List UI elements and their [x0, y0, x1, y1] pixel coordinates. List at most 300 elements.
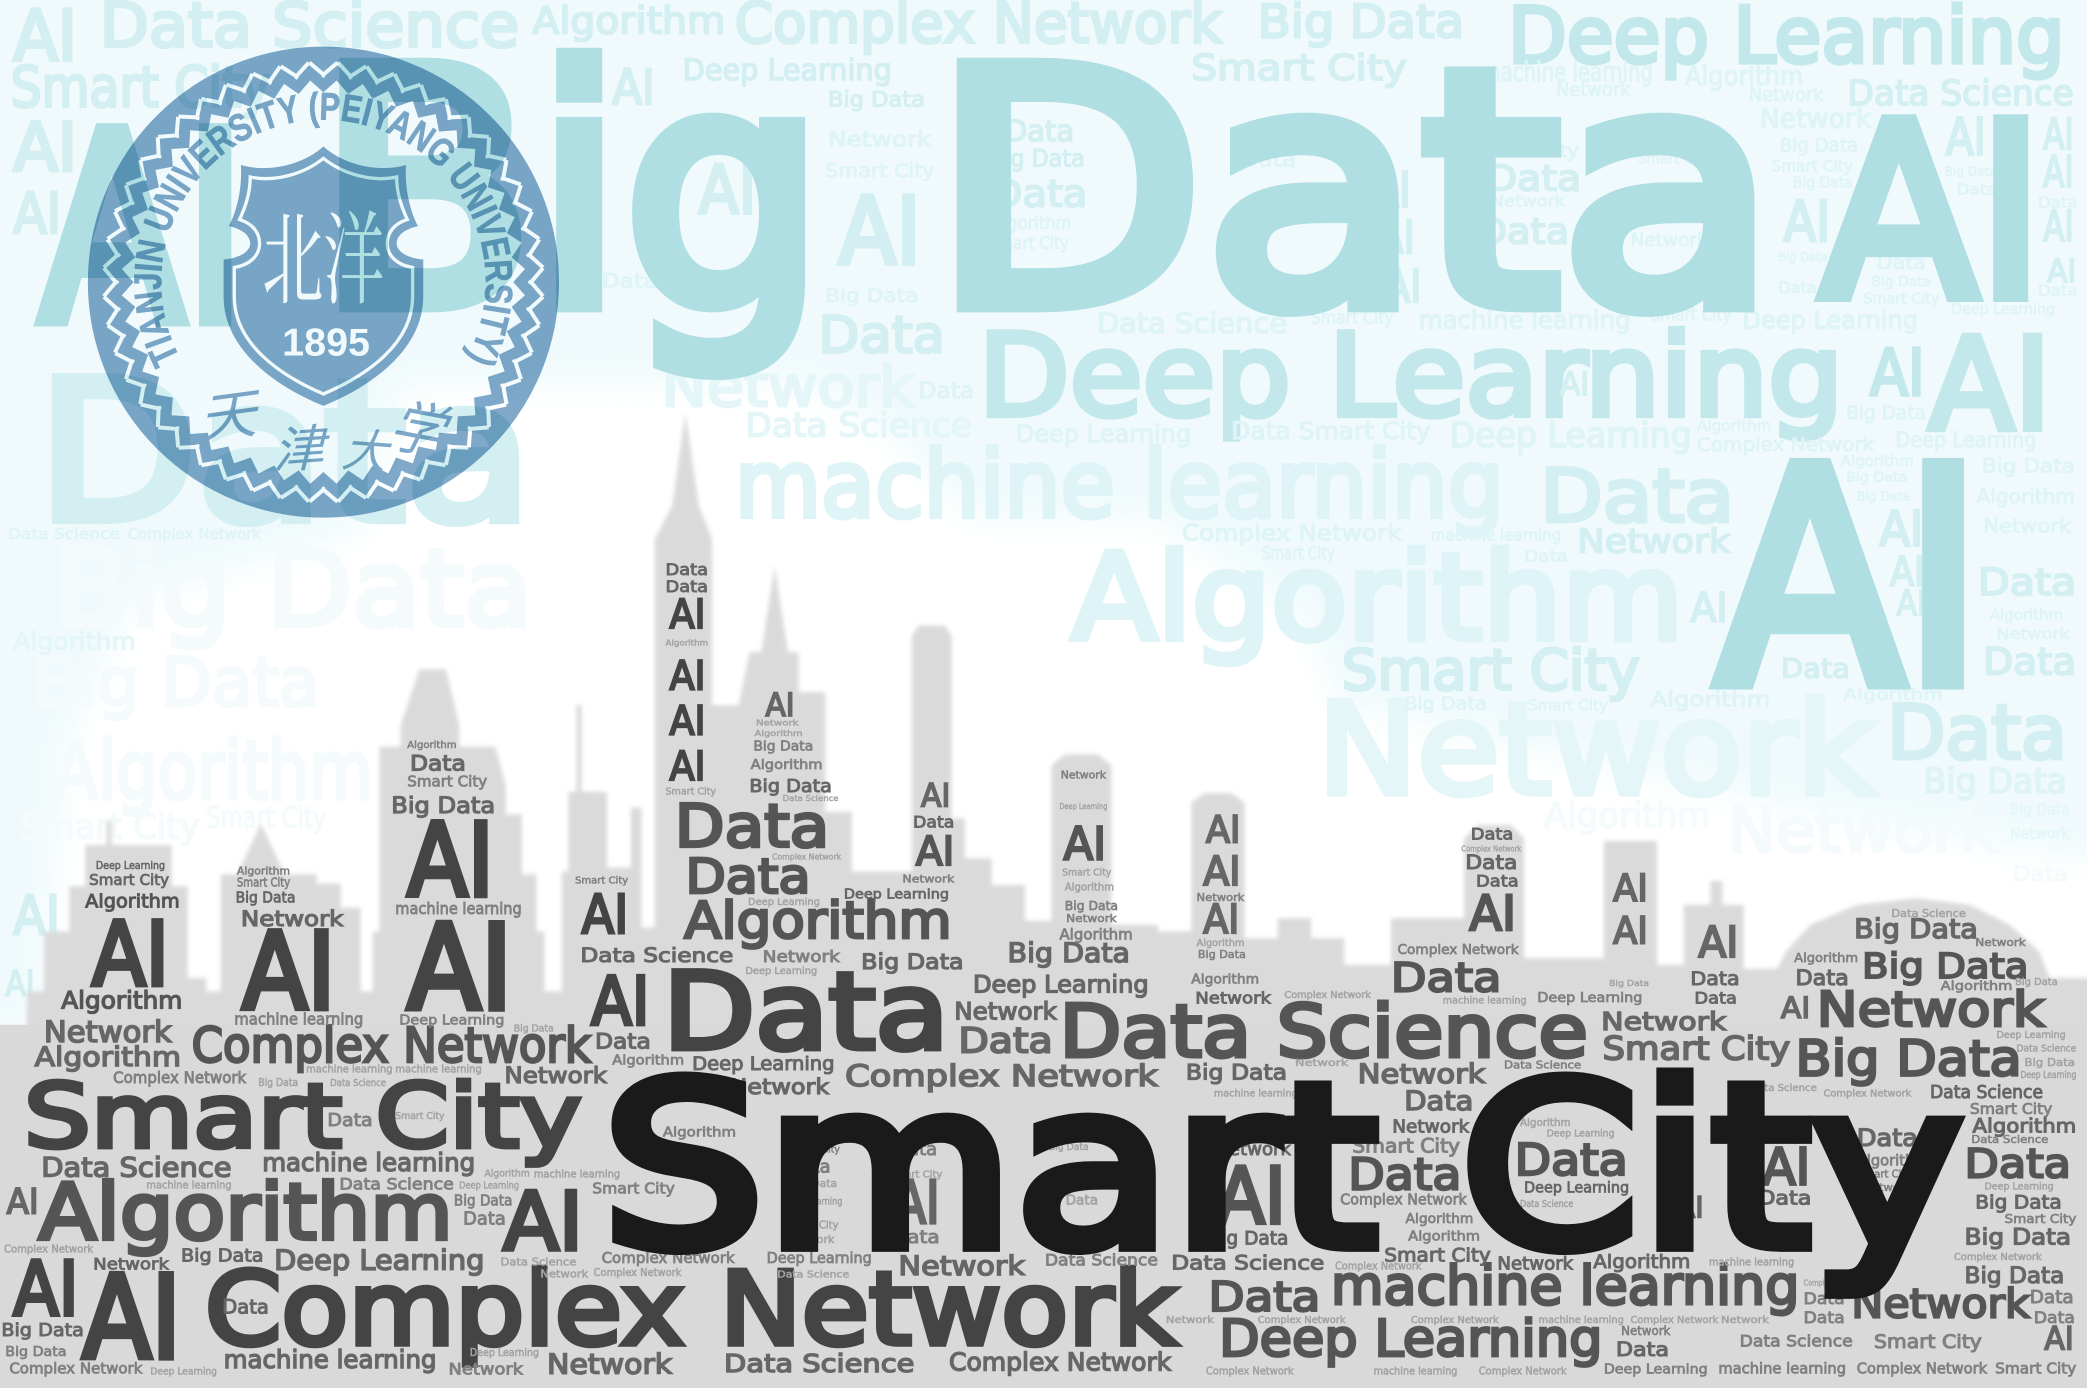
- lower word cloud in grey over the skyline: Data Science: [1171, 1251, 1324, 1275]
- upper word cloud in teal: Complex Network: [128, 526, 261, 543]
- lower word cloud in grey over the skyline: Algorithm: [1197, 938, 1244, 949]
- upper word cloud in teal: AI: [2043, 202, 2074, 252]
- lower word cloud in grey over the skyline: Data: [1965, 1142, 2071, 1188]
- lower word cloud in grey over the skyline: Network: [1601, 1007, 1727, 1036]
- word: AI left: AI: [40, 79, 246, 381]
- lower word cloud in grey over the skyline: Network: [729, 1075, 830, 1100]
- lower word cloud in grey over the skyline: Data: [1694, 988, 1737, 1007]
- lower word cloud in grey over the skyline: Complex Network: [1284, 990, 1372, 1001]
- word: Deep Learning: Deep Learning: [978, 310, 1843, 442]
- lower word cloud in grey over the skyline: AI: [7, 1183, 39, 1223]
- lower word cloud in grey over the skyline: Data Science: [1520, 1199, 1573, 1210]
- lower word cloud in grey over the skyline: Network: [1358, 1059, 1486, 1090]
- upper word cloud in teal: Data: [602, 268, 658, 292]
- upper word cloud in teal: Big Data: [1982, 453, 2075, 477]
- upper word cloud in teal: Data: [1978, 560, 2076, 604]
- lower word cloud in grey over the skyline: Smart City: [1874, 1332, 1982, 1353]
- lower word cloud in grey over the skyline: AI: [2044, 1319, 2074, 1357]
- upper word cloud in teal: Network: [1728, 796, 1997, 867]
- lower word cloud in grey over the skyline: Complex Network: [1857, 1360, 1988, 1377]
- upper word cloud in teal: Algorithm: [1841, 453, 1914, 470]
- upper word cloud in teal: Network: [1491, 191, 1566, 210]
- upper word cloud in teal: AI: [2047, 252, 2076, 290]
- upper word cloud in teal: Big Data: [1846, 471, 1907, 486]
- lower word cloud in grey over the skyline: Data Science: [2016, 1043, 2077, 1054]
- lower word cloud in grey over the skyline: Network: [241, 907, 344, 932]
- lower word cloud in grey over the skyline: Data Science: [500, 1256, 576, 1269]
- lower word cloud in grey over the skyline: Data Science: [783, 794, 839, 803]
- lower word cloud in grey over the skyline: Big Data: [791, 1177, 837, 1190]
- lower word cloud in grey over the skyline: Data: [1690, 969, 1740, 990]
- lower word cloud in grey over the skyline: AI: [921, 776, 950, 814]
- lower word cloud in grey over the skyline: Complex Network: [594, 1266, 682, 1279]
- upper word cloud in teal: Algorithm: [1544, 797, 1710, 837]
- lower word cloud in grey over the skyline: Complex Network: [1411, 1315, 1499, 1326]
- lower word cloud in grey over the skyline: Big Data: [1975, 1192, 2062, 1213]
- lower word cloud in grey over the skyline: Deep Learning: [748, 897, 820, 908]
- spire words: Smart City: [665, 786, 717, 797]
- lower word cloud in grey over the skyline: Data Science: [1750, 1083, 1817, 1094]
- lower word cloud in grey over the skyline: Deep Learning: [96, 859, 165, 872]
- lower word cloud in grey over the skyline: AI: [1613, 909, 1648, 953]
- spire words: AI: [669, 744, 705, 790]
- word: Network: Network: [1318, 676, 1874, 823]
- lower word cloud in grey over the skyline: Smart City: [1384, 1246, 1491, 1267]
- upper word cloud in teal: Smart City: [1772, 157, 1853, 176]
- upper word cloud in teal: Deep Learning: [1016, 420, 1191, 448]
- lower word cloud in grey over the skyline: Big Data: [2015, 977, 2058, 988]
- lower word cloud in grey over the skyline: Data Science: [1891, 907, 1966, 920]
- upper word cloud in teal: Big Data: [2010, 801, 2070, 818]
- lower word cloud in grey over the skyline: Big Data: [1198, 948, 1246, 961]
- lower word cloud in grey over the skyline: Data: [327, 1111, 373, 1131]
- lower word cloud in grey over the skyline: Complex Network: [113, 1068, 247, 1087]
- lower word cloud in grey over the skyline: Data: [410, 752, 466, 777]
- upper word cloud in teal: Data: [1877, 250, 1926, 274]
- lower word cloud in grey over the skyline: Smart City: [592, 1181, 675, 1198]
- upper word cloud in teal: AI: [1870, 337, 1925, 411]
- lower word cloud in grey over the skyline: Deep Learning: [150, 1367, 217, 1378]
- upper word cloud in teal: Network: [1650, 138, 1698, 152]
- lower word cloud in grey over the skyline: Big Data: [2024, 1056, 2075, 1069]
- upper word cloud in teal: Network: [662, 355, 915, 420]
- upper word cloud in teal: AI: [13, 108, 77, 186]
- lower word cloud in grey over the skyline: Algorithm: [663, 1125, 736, 1140]
- lower word cloud in grey over the skyline: Network: [898, 1251, 1026, 1282]
- lower word cloud in grey over the skyline: AI: [894, 1169, 940, 1237]
- lower word cloud in grey over the skyline: Deep Learning: [1059, 802, 1107, 811]
- lower word cloud in grey over the skyline: Smart City: [2004, 1212, 2076, 1226]
- seal shield: [224, 146, 423, 406]
- lower word cloud in grey over the skyline: Deep Learning: [745, 966, 817, 977]
- word: Smart City main: Smart City: [602, 1037, 1963, 1300]
- lower word cloud in grey over the skyline: Smart City: [785, 1218, 839, 1231]
- lower word cloud in grey over the skyline: Data: [1348, 1150, 1461, 1201]
- lower word cloud in grey over the skyline: Complex Network: [1398, 943, 1519, 958]
- upper word cloud in teal: Network: [1760, 104, 1872, 135]
- lower word cloud in grey over the skyline: AI: [1217, 1152, 1286, 1242]
- lower word cloud in grey over the skyline: Big Data: [861, 950, 964, 975]
- lower word cloud in grey over the skyline: Algorithm: [1065, 880, 1114, 893]
- lower word cloud in grey over the skyline: Network: [1066, 912, 1118, 925]
- lower word cloud in grey over the skyline: Data Science: [339, 1175, 454, 1194]
- upper word cloud in teal: Algorithm: [1843, 685, 1943, 704]
- upper word cloud in teal: Algorithm: [1977, 484, 2075, 508]
- word: Big: Big: [317, 2, 825, 380]
- lower word cloud in grey over the skyline: Data: [1476, 871, 1519, 890]
- upper word cloud in teal: Algorithm: [992, 214, 1071, 234]
- spire words: AI: [669, 592, 705, 638]
- spire words: Data: [665, 577, 708, 596]
- upper word cloud in teal: Deep Learning: [1895, 428, 2036, 453]
- lower word cloud in grey over the skyline: Complex Network: [192, 1019, 591, 1074]
- lower word cloud in grey over the skyline: Smart City: [1750, 1134, 1800, 1145]
- upper word cloud in teal: Complex Network: [1182, 520, 1403, 546]
- lower word cloud in grey over the skyline: AI: [916, 829, 954, 875]
- upper word cloud in teal: AI: [2043, 110, 2074, 160]
- upper word cloud in teal: Big Data: [1404, 694, 1487, 714]
- lower word cloud in grey over the skyline: Algorithm: [1593, 1252, 1690, 1273]
- word: Algorithm: Algorithm: [39, 1168, 453, 1258]
- lower word cloud in grey over the skyline: Network: [1166, 1315, 1215, 1326]
- lower word cloud in grey over the skyline: machine learning: [1718, 1360, 1846, 1377]
- lower word cloud in grey over the skyline: Big Data: [1862, 947, 2028, 987]
- lower word cloud in grey over the skyline: AI: [13, 1246, 79, 1333]
- upper word cloud in teal: Network: [1996, 626, 2070, 643]
- lower word cloud in grey over the skyline: Deep Learning: [1537, 991, 1642, 1006]
- upper word cloud in teal: Smart City: [1476, 141, 1579, 162]
- upper word cloud in teal: Big Data: [1871, 275, 1931, 290]
- word: AI top right: AI: [1821, 74, 2044, 352]
- lower word cloud in grey over the skyline: Deep Learning: [1524, 1179, 1629, 1196]
- upper word cloud in teal: AI: [699, 151, 756, 229]
- seal calligraphy name: 津: [270, 419, 336, 481]
- lower word cloud in grey over the skyline: Complex Network: [1823, 1089, 1912, 1100]
- upper word cloud in teal: machine learning: [1431, 525, 1561, 544]
- lower word cloud in grey over the skyline: Smart City: [407, 773, 487, 790]
- upper word cloud in teal: Smart City: [20, 807, 200, 847]
- word: Data left: Data: [37, 340, 532, 565]
- upper word cloud in teal: AI: [2043, 147, 2074, 197]
- lower word cloud in grey over the skyline: Big Data: [181, 1247, 264, 1267]
- lower word cloud in grey over the skyline: Algorithm: [237, 864, 290, 877]
- lower word cloud in grey over the skyline: Big Data: [1796, 1029, 2022, 1087]
- shield inner outline: [234, 158, 413, 394]
- lower word cloud in grey over the skyline: Deep Learning: [1985, 1182, 2054, 1193]
- upper word cloud in teal: Smart City: [1311, 308, 1394, 328]
- lower word cloud in grey over the skyline: Big Data: [1609, 979, 1649, 988]
- lower word cloud in grey over the skyline: Algorithm: [751, 758, 823, 773]
- upper word cloud in teal: Algorithm: [1650, 688, 1770, 713]
- upper word cloud in teal: AI: [1879, 503, 1923, 558]
- upper word cloud in teal: Data Science: [745, 405, 972, 444]
- lower word cloud in grey over the skyline: AI: [1063, 818, 1106, 871]
- lower word cloud in grey over the skyline: Data Science: [724, 1349, 914, 1378]
- upper word cloud in teal: machine learning: [1419, 306, 1630, 335]
- lower word cloud in grey over the skyline: Big Data: [753, 740, 813, 755]
- lower word cloud in grey over the skyline: Complex Network: [602, 1250, 735, 1267]
- upper word cloud in teal: machine learning: [1481, 57, 1653, 88]
- lower word cloud in grey over the skyline: Network: [1392, 1117, 1469, 1137]
- lower word cloud in grey over the skyline: Data: [958, 1022, 1053, 1062]
- lower word cloud in grey over the skyline: machine learning: [1443, 995, 1527, 1006]
- upper word cloud in teal: Network: [1983, 513, 2071, 537]
- lower word cloud in grey over the skyline: Big Data: [454, 1193, 512, 1210]
- upper word cloud in teal: Network: [1630, 231, 1708, 251]
- lower word cloud in grey over the skyline: Smart City: [1062, 868, 1112, 879]
- lower word cloud in grey over the skyline: Complex Network: [1461, 845, 1522, 854]
- lower word cloud in grey over the skyline: Big Data: [1065, 899, 1118, 913]
- lower word cloud in grey over the skyline: Deep Learning: [844, 887, 949, 902]
- lower word cloud in grey over the skyline: Complex Network: [1335, 1260, 1422, 1273]
- lower word cloud in grey over the skyline: Data Science: [330, 1078, 386, 1089]
- upper word cloud in teal: Data: [2038, 282, 2078, 299]
- lower word cloud in grey over the skyline: Network: [1215, 1140, 1291, 1160]
- upper word cloud in teal: Smart City: [206, 801, 326, 835]
- upper word cloud in teal: Data: [1005, 114, 1074, 148]
- lower word cloud in grey over the skyline: Network: [1851, 1281, 2030, 1327]
- lower word cloud in grey over the skyline: Smart City: [1603, 1029, 1790, 1067]
- lower word cloud in grey over the skyline: AI: [242, 911, 335, 1035]
- upper word cloud in teal: AI: [1929, 312, 2051, 459]
- university seal logo: [88, 46, 559, 518]
- spire words: AI: [669, 653, 705, 699]
- lower word cloud in grey over the skyline: Complex Network: [1340, 1191, 1467, 1208]
- upper word cloud in teal: Data: [1887, 690, 2067, 777]
- lower word cloud in grey over the skyline: Data: [2034, 1308, 2075, 1327]
- lower word cloud in grey over the skyline: machine learning: [262, 1148, 475, 1177]
- lower word cloud in grey over the skyline: Algorithm: [612, 1054, 684, 1069]
- lower word cloud in grey over the skyline: machine learning: [224, 1345, 437, 1374]
- word: machine learning: machine learning: [1331, 1255, 1800, 1317]
- upper word cloud in teal: Data: [1487, 158, 1581, 199]
- upper word cloud in teal: Big Data: [828, 87, 925, 112]
- lower word cloud in grey over the skyline: Network: [1975, 936, 2027, 949]
- lower word cloud in grey over the skyline: Deep Learning: [1547, 1128, 1615, 1139]
- upper word cloud in teal: Network: [2010, 825, 2070, 842]
- spire words: Algorithm: [665, 638, 708, 647]
- lower word cloud in grey over the skyline: Network: [1197, 891, 1245, 904]
- spire words: [665, 560, 717, 797]
- lower word cloud in grey over the skyline: AI: [765, 686, 795, 724]
- lower word cloud in grey over the skyline: Data Science: [1930, 1083, 2043, 1103]
- upper word cloud in teal: Smart City: [1191, 48, 1407, 89]
- lower word cloud in grey over the skyline: Data: [1515, 1135, 1628, 1186]
- lower word cloud in grey over the skyline: Network: [44, 1015, 172, 1049]
- ground band: [0, 1025, 2087, 1388]
- lower word cloud in grey over the skyline: Deep Learning: [2020, 1070, 2076, 1081]
- lower word cloud in grey over the skyline: AI: [1469, 887, 1516, 942]
- word: AI large right: AI: [1717, 407, 1983, 751]
- lower word cloud in grey over the skyline: machine learning: [1374, 1365, 1457, 1378]
- upper word cloud in teal: Data: [918, 378, 974, 404]
- lower word cloud in grey over the skyline: Big Data: [258, 1076, 298, 1089]
- upper word cloud in teal: Big Data: [825, 286, 918, 307]
- lower word cloud in grey over the skyline: Data: [463, 1209, 506, 1229]
- lower word cloud in grey over the skyline: Network: [540, 1268, 589, 1281]
- lower word cloud in grey over the skyline: AI: [1676, 1191, 1704, 1225]
- word: Deep Learning: Deep Learning: [1219, 1309, 1603, 1368]
- lower word cloud in grey over the skyline: AI: [591, 963, 650, 1041]
- lower word cloud in grey over the skyline: Smart City: [89, 872, 169, 889]
- spire words: Data: [665, 560, 708, 579]
- lower word cloud in grey over the skyline: Complex Network: [4, 1242, 94, 1255]
- upper word cloud in teal: AI: [1560, 365, 1589, 403]
- lower word cloud in grey over the skyline: Deep Learning: [470, 1346, 539, 1359]
- upper word cloud in teal: Big Data: [1793, 175, 1853, 192]
- upper word cloud in teal: Algorithm: [1990, 607, 2063, 624]
- lower word cloud in grey over the skyline: Big Data: [1965, 1224, 2071, 1250]
- lower word cloud in grey over the skyline: Big Data: [1049, 1142, 1089, 1153]
- upper word cloud in teal: Big Data: [53, 527, 532, 651]
- upper word cloud in teal: Data: [2038, 195, 2078, 212]
- lower word cloud in grey over the skyline: Algorithm: [1973, 1113, 2076, 1137]
- lower word cloud in grey over the skyline: Complex Network: [1630, 1315, 1719, 1326]
- upper word cloud in teal: AI: [1378, 211, 1415, 264]
- lower word cloud in grey over the skyline: Data Science: [777, 1270, 849, 1281]
- upper word cloud in teal: Data: [1983, 640, 2076, 684]
- upper word cloud in teal: Algorithm: [1697, 418, 1772, 435]
- lower word cloud in grey over the skyline: Smart City: [1995, 1360, 2077, 1377]
- upper word cloud in teal: Data: [1477, 212, 1569, 253]
- lower word cloud in grey over the skyline: machine learning: [306, 1063, 393, 1076]
- lower word cloud in grey over the skyline: Smart City: [237, 875, 290, 889]
- lower word cloud in grey over the skyline: Big Data: [1854, 914, 1978, 945]
- lower word cloud in grey over the skyline: Algorithm: [35, 1042, 181, 1073]
- lower word cloud in grey over the skyline: Complex Network: [1803, 1279, 1862, 1288]
- lower word cloud in grey over the skyline: Network: [902, 872, 955, 885]
- lower word cloud in grey over the skyline: Algorithm: [1857, 1153, 1929, 1170]
- upper word cloud in teal: Data Science: [8, 526, 120, 543]
- upper word cloud in teal: Algorithm: [13, 627, 136, 655]
- lower word cloud in grey over the skyline: Algorithm: [684, 891, 952, 950]
- upper word cloud in teal: AI: [13, 885, 60, 947]
- upper word cloud in teal: AI: [1690, 585, 1728, 631]
- lower word cloud in grey over the skyline: Complex Network: [949, 1348, 1172, 1377]
- lower word cloud in grey over the skyline: Data: [1616, 1337, 1669, 1361]
- lower word cloud in grey over the skyline: Complex Network: [9, 1360, 143, 1377]
- upper word cloud in teal: AI: [1946, 107, 1986, 166]
- upper word cloud in teal: [5, 0, 2078, 1004]
- upper word cloud in teal: Data: [1778, 278, 1817, 297]
- upper word cloud in teal: Data: [1781, 653, 1850, 684]
- upper word cloud in teal: AI: [1897, 584, 1926, 624]
- upper word cloud in teal: Deep Learning: [1951, 301, 2055, 318]
- word: Data: Data: [932, 2, 1777, 380]
- upper word cloud in teal: Data: [1240, 147, 1296, 172]
- seal calligraphy name: [197, 380, 463, 481]
- lower word cloud in grey over the skyline: Smart City: [1970, 1101, 2053, 1118]
- word: Data Science: Data Science: [1059, 990, 1588, 1074]
- lower word cloud in grey over the skyline: Smart City: [1858, 1168, 1911, 1181]
- lower word cloud in grey over the skyline: Network: [954, 997, 1057, 1025]
- lower word cloud in grey over the skyline: AI: [1203, 897, 1239, 943]
- lower word cloud in grey over the skyline: Algorithm: [1794, 951, 1858, 965]
- upper word cloud in teal: Network: [1577, 521, 1731, 560]
- city skyline silhouette: [0, 413, 2087, 1388]
- upper word cloud in teal: AI: [5, 964, 35, 1004]
- upper word cloud in teal: Data Science: [1097, 307, 1287, 340]
- lower word cloud in grey over the skyline: AI: [582, 884, 628, 946]
- upper word cloud in teal: Data Science: [1847, 74, 2074, 114]
- lower word cloud in grey over the skyline: Deep Learning: [1996, 1030, 2066, 1041]
- lower word cloud in grey over the skyline: machine learning: [146, 1178, 232, 1191]
- lower word cloud in grey over the skyline: Network: [1497, 1255, 1573, 1275]
- lower word cloud in grey over the skyline: Data: [1471, 825, 1513, 844]
- lower word cloud in grey over the skyline: Algorithm: [484, 1168, 530, 1179]
- lower word cloud in grey over the skyline: Network: [449, 1360, 524, 1379]
- lower word cloud in grey over the skyline: AI: [83, 1251, 181, 1384]
- lower word cloud in grey over the skyline: Smart City: [1352, 1133, 1460, 1157]
- lower word cloud in grey over the skyline: Data: [222, 1294, 269, 1318]
- lower word cloud in grey over the skyline: Network: [1295, 1058, 1349, 1069]
- upper word cloud in teal: Smart City: [1863, 290, 1940, 307]
- lower word cloud in grey over the skyline: Data: [685, 850, 811, 905]
- lower word cloud in grey over the skyline: Complex Network: [1206, 1365, 1295, 1378]
- lower word cloud in grey over the skyline: Big Data: [1, 1321, 84, 1341]
- upper word cloud in teal: Deep Learning: [1449, 416, 1692, 456]
- lower word cloud in grey over the skyline: Smart City: [791, 1144, 840, 1155]
- lower word cloud in grey over the skyline: Network: [763, 947, 841, 966]
- lower word cloud in grey over the skyline: Data Science: [1045, 1251, 1158, 1270]
- upper word cloud in teal: Big Data: [1778, 250, 1827, 264]
- upper word cloud in teal: Algorithm: [53, 724, 373, 817]
- lower word cloud in grey over the skyline: Data: [1465, 850, 1517, 874]
- upper word cloud in teal: Smart City: [1342, 638, 1640, 703]
- upper word cloud in teal: Big Data: [1923, 762, 2067, 802]
- lower word cloud in grey over the skyline: Deep Learning: [1604, 1362, 1708, 1377]
- lower word cloud in grey over the skyline: Data: [788, 1157, 831, 1177]
- lower word cloud in grey over the skyline: Algorithm: [1408, 1229, 1480, 1244]
- shield year 1895: 1895: [282, 321, 370, 364]
- upper word cloud in teal: AI: [1371, 163, 1411, 218]
- lower word cloud in grey over the skyline: Deep Learning: [767, 1250, 872, 1267]
- upper word cloud in teal: Data Smart City: [1231, 417, 1431, 445]
- word: Data centre: Data: [663, 951, 949, 1075]
- upper word cloud in teal: Data: [1957, 181, 1996, 198]
- lower word cloud in grey over the skyline: Data: [1803, 1289, 1845, 1308]
- lower word cloud in grey over the skyline: Data: [894, 1140, 937, 1160]
- lower word cloud in grey over the skyline: Big Data: [391, 793, 495, 819]
- lower word cloud in grey over the skyline: Data Science: [580, 943, 733, 967]
- word: Complex Network: Complex Network: [205, 1250, 1177, 1368]
- lower word cloud in grey over the skyline: Big Data: [749, 777, 832, 797]
- lower word cloud in grey over the skyline: Network: [93, 1255, 170, 1274]
- lower word cloud in grey over the skyline: Data: [1796, 966, 1849, 991]
- lower word cloud in grey over the skyline: [1, 560, 2077, 1384]
- upper word cloud in teal: AI: [13, 182, 61, 247]
- upper word cloud in teal: Smart City: [11, 55, 270, 120]
- upper word cloud in teal: AI: [612, 61, 655, 116]
- lower word cloud in grey over the skyline: Deep Learning: [783, 1196, 843, 1207]
- lower word cloud in grey over the skyline: machine learning: [395, 899, 522, 918]
- upper word cloud in teal: Data: [1524, 547, 1568, 566]
- lower word cloud in grey over the skyline: AI: [407, 900, 512, 1037]
- lower word cloud in grey over the skyline: Big Data: [1040, 1193, 1098, 1208]
- lower word cloud in grey over the skyline: Big Data: [236, 889, 295, 906]
- lower word cloud in grey over the skyline: Data: [892, 1228, 940, 1248]
- lower word cloud in grey over the skyline: Network: [1721, 1315, 1770, 1326]
- lower word cloud in grey over the skyline: Network: [1621, 1324, 1670, 1338]
- lower word cloud in grey over the skyline: Complex Network: [1258, 1315, 1346, 1326]
- seal outer ring: [102, 61, 544, 503]
- lower word cloud in grey over the skyline: Big Data: [5, 1345, 67, 1360]
- lower word cloud in grey over the skyline: Algorithm: [1191, 972, 1259, 987]
- lower word cloud in grey over the skyline: Big Data: [1209, 1228, 1288, 1249]
- lower word cloud in grey over the skyline: Data: [595, 1030, 651, 1055]
- seal calligraphy name: 天: [197, 380, 267, 453]
- lower word cloud in grey over the skyline: AI: [503, 1176, 583, 1269]
